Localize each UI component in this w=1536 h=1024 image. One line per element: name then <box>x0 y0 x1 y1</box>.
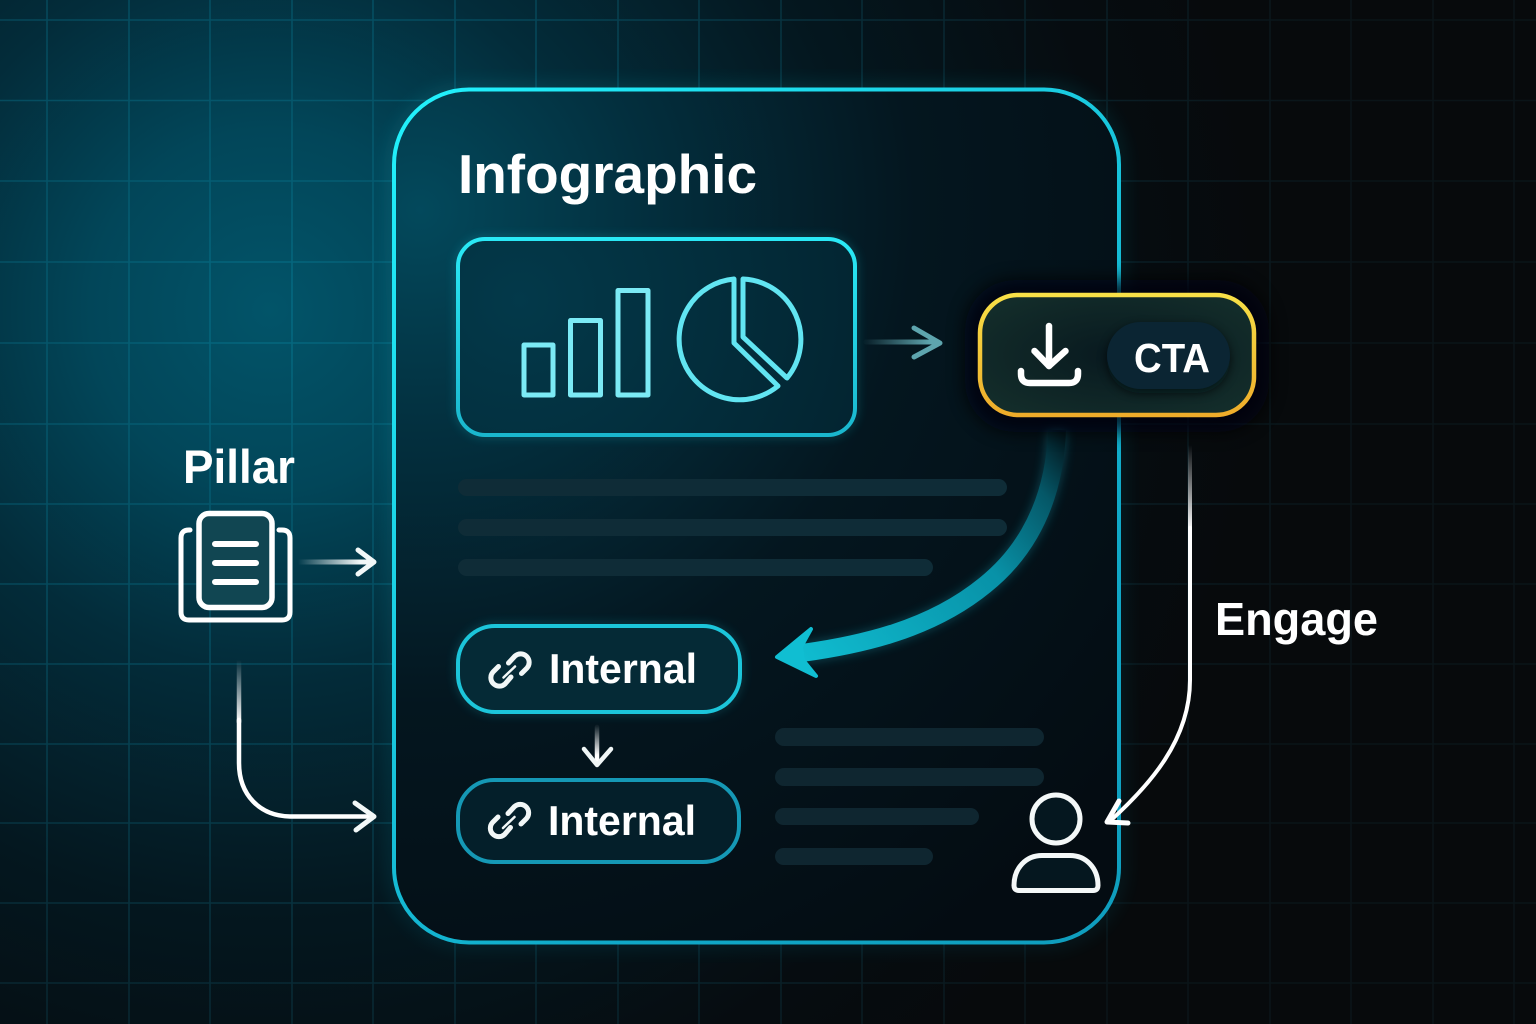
icon: download <box>1021 326 1078 383</box>
button: Internal 1 <box>458 626 740 712</box>
panel: CTA button <box>965 280 1269 432</box>
arrow: CTA curve to Internal <box>777 430 1057 676</box>
text placeholder lines: lower <box>775 728 1044 865</box>
pill: CTA: CTA <box>1134 335 1210 381</box>
arrow: CTA to user <box>1107 445 1190 823</box>
label: Internal: Internal <box>549 645 697 692</box>
arrow: internal to internal <box>584 727 611 765</box>
icon: link <box>491 654 529 686</box>
arrow: Pillar to panel <box>298 550 374 574</box>
text placeholder lines: upper <box>458 479 1007 576</box>
label: Engage: Engage <box>1215 593 1378 645</box>
panel: infographic card <box>394 90 1119 942</box>
icon: pillar document <box>181 514 290 620</box>
arrow: Pillar down to panel <box>239 660 374 830</box>
button: Internal 2 <box>458 780 739 862</box>
label: Pillar: Pillar <box>183 440 295 493</box>
icon: pie chart <box>679 279 801 400</box>
label: Internal: Internal <box>548 797 696 844</box>
heading: Infographic: Infographic <box>458 143 757 205</box>
panel: chart card <box>458 239 855 435</box>
pill: CTA <box>1107 322 1230 393</box>
icon: user <box>1014 795 1098 890</box>
arrow: chart to CTA <box>866 328 940 357</box>
icon: bar chart <box>524 290 648 395</box>
icon: link <box>490 804 529 837</box>
